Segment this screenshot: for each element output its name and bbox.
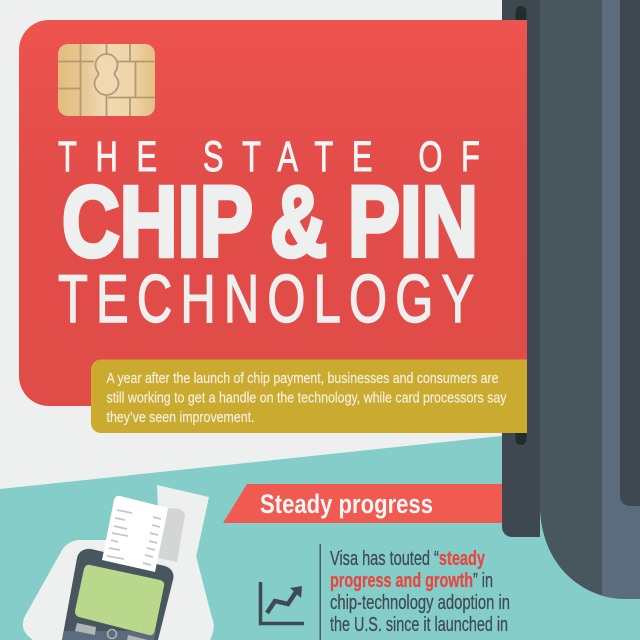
white backdrop [23, 540, 214, 640]
receipt back [157, 485, 209, 565]
body text: chip-technology adoption in [330, 592, 510, 614]
title: chip and pin: PIN [348, 166, 478, 278]
terminal screen [75, 565, 164, 635]
icon: payment terminal with receipt [23, 485, 214, 640]
divider line [320, 544, 321, 640]
terminal body [62, 549, 174, 640]
title: chip and pin [62, 166, 478, 278]
title: chip and pin: & [270, 166, 327, 278]
heading ribbon: steady progress: Steady progress [260, 489, 433, 519]
icon: rising chart [260, 582, 304, 624]
title: chip and pin: CHIP [62, 166, 253, 278]
receipt front [102, 496, 168, 572]
title: the state of: THE STATE OF [58, 132, 480, 180]
intro text box: A year after the launch of chip payment, businesses and consumers are [106, 370, 498, 387]
body text [330, 548, 510, 636]
body text: progress and growth” in [330, 570, 493, 592]
heading ribbon: steady progress [223, 484, 502, 523]
terminal buttons [75, 623, 96, 635]
intro text box: they’ve seen improvement. [106, 409, 254, 426]
teal section background [0, 435, 640, 640]
icon: card chip [58, 44, 155, 116]
title: technology: TECHNOLOGY [58, 260, 474, 337]
body text: Visa has touted “steady [330, 548, 486, 570]
body text: the U.S. since it launched in [330, 614, 508, 636]
intro text box: still working to get a handle on the technology, while card processors say [106, 390, 507, 406]
red credit card [19, 20, 527, 406]
intro text box [91, 360, 527, 433]
card reader device [502, 0, 640, 599]
